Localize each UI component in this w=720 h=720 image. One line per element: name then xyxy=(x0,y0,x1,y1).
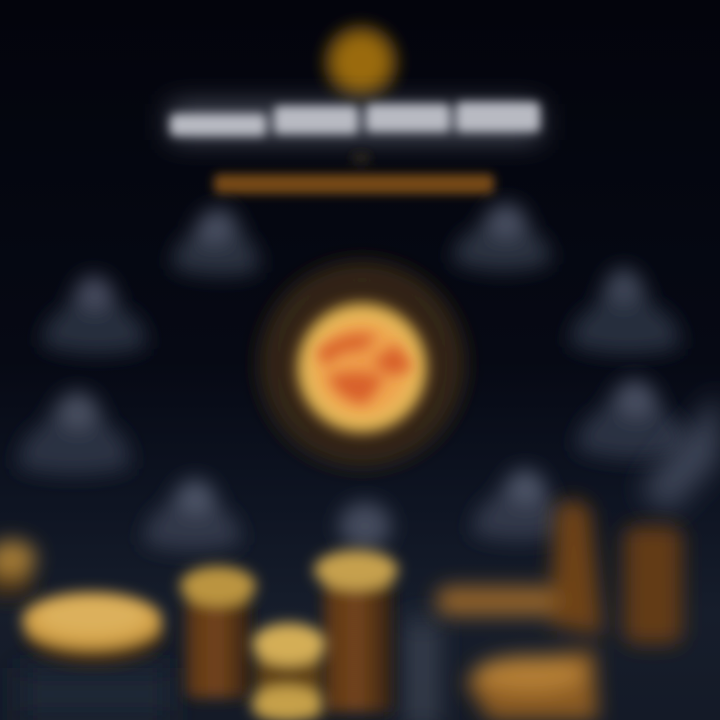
coin disc xyxy=(296,302,428,434)
cloud node: bottom centre xyxy=(339,502,391,550)
cloud node: bottom right xyxy=(472,468,564,541)
wooden blocks: right cluster xyxy=(436,500,682,720)
coin stack: tall centre xyxy=(314,550,398,712)
title band (illegible in the blurred reference) xyxy=(170,102,540,136)
coin stack: short centre xyxy=(251,623,326,720)
diagonal light streak xyxy=(640,392,720,514)
cloud node: upper right xyxy=(452,202,551,272)
coin stack: wide dish xyxy=(22,592,164,664)
icon: top gold coin xyxy=(323,24,399,100)
coin symbol xyxy=(316,334,414,404)
cloud node: middle left xyxy=(42,274,146,355)
floor highlight xyxy=(20,620,436,720)
cloud node: upper left xyxy=(172,206,259,276)
title glow xyxy=(170,104,540,140)
outer halo ring xyxy=(254,256,470,472)
subtitle band (illegible in the blurred reference) xyxy=(214,154,494,194)
cloud node: bottom left xyxy=(144,478,240,551)
cloud node: middle right xyxy=(570,266,680,355)
cloud node: lower right xyxy=(576,378,688,460)
cloud node: lower left xyxy=(18,390,130,475)
coin stack: far left xyxy=(0,540,36,596)
coin stack: tall left xyxy=(180,566,256,698)
central glowing coin xyxy=(254,256,470,472)
